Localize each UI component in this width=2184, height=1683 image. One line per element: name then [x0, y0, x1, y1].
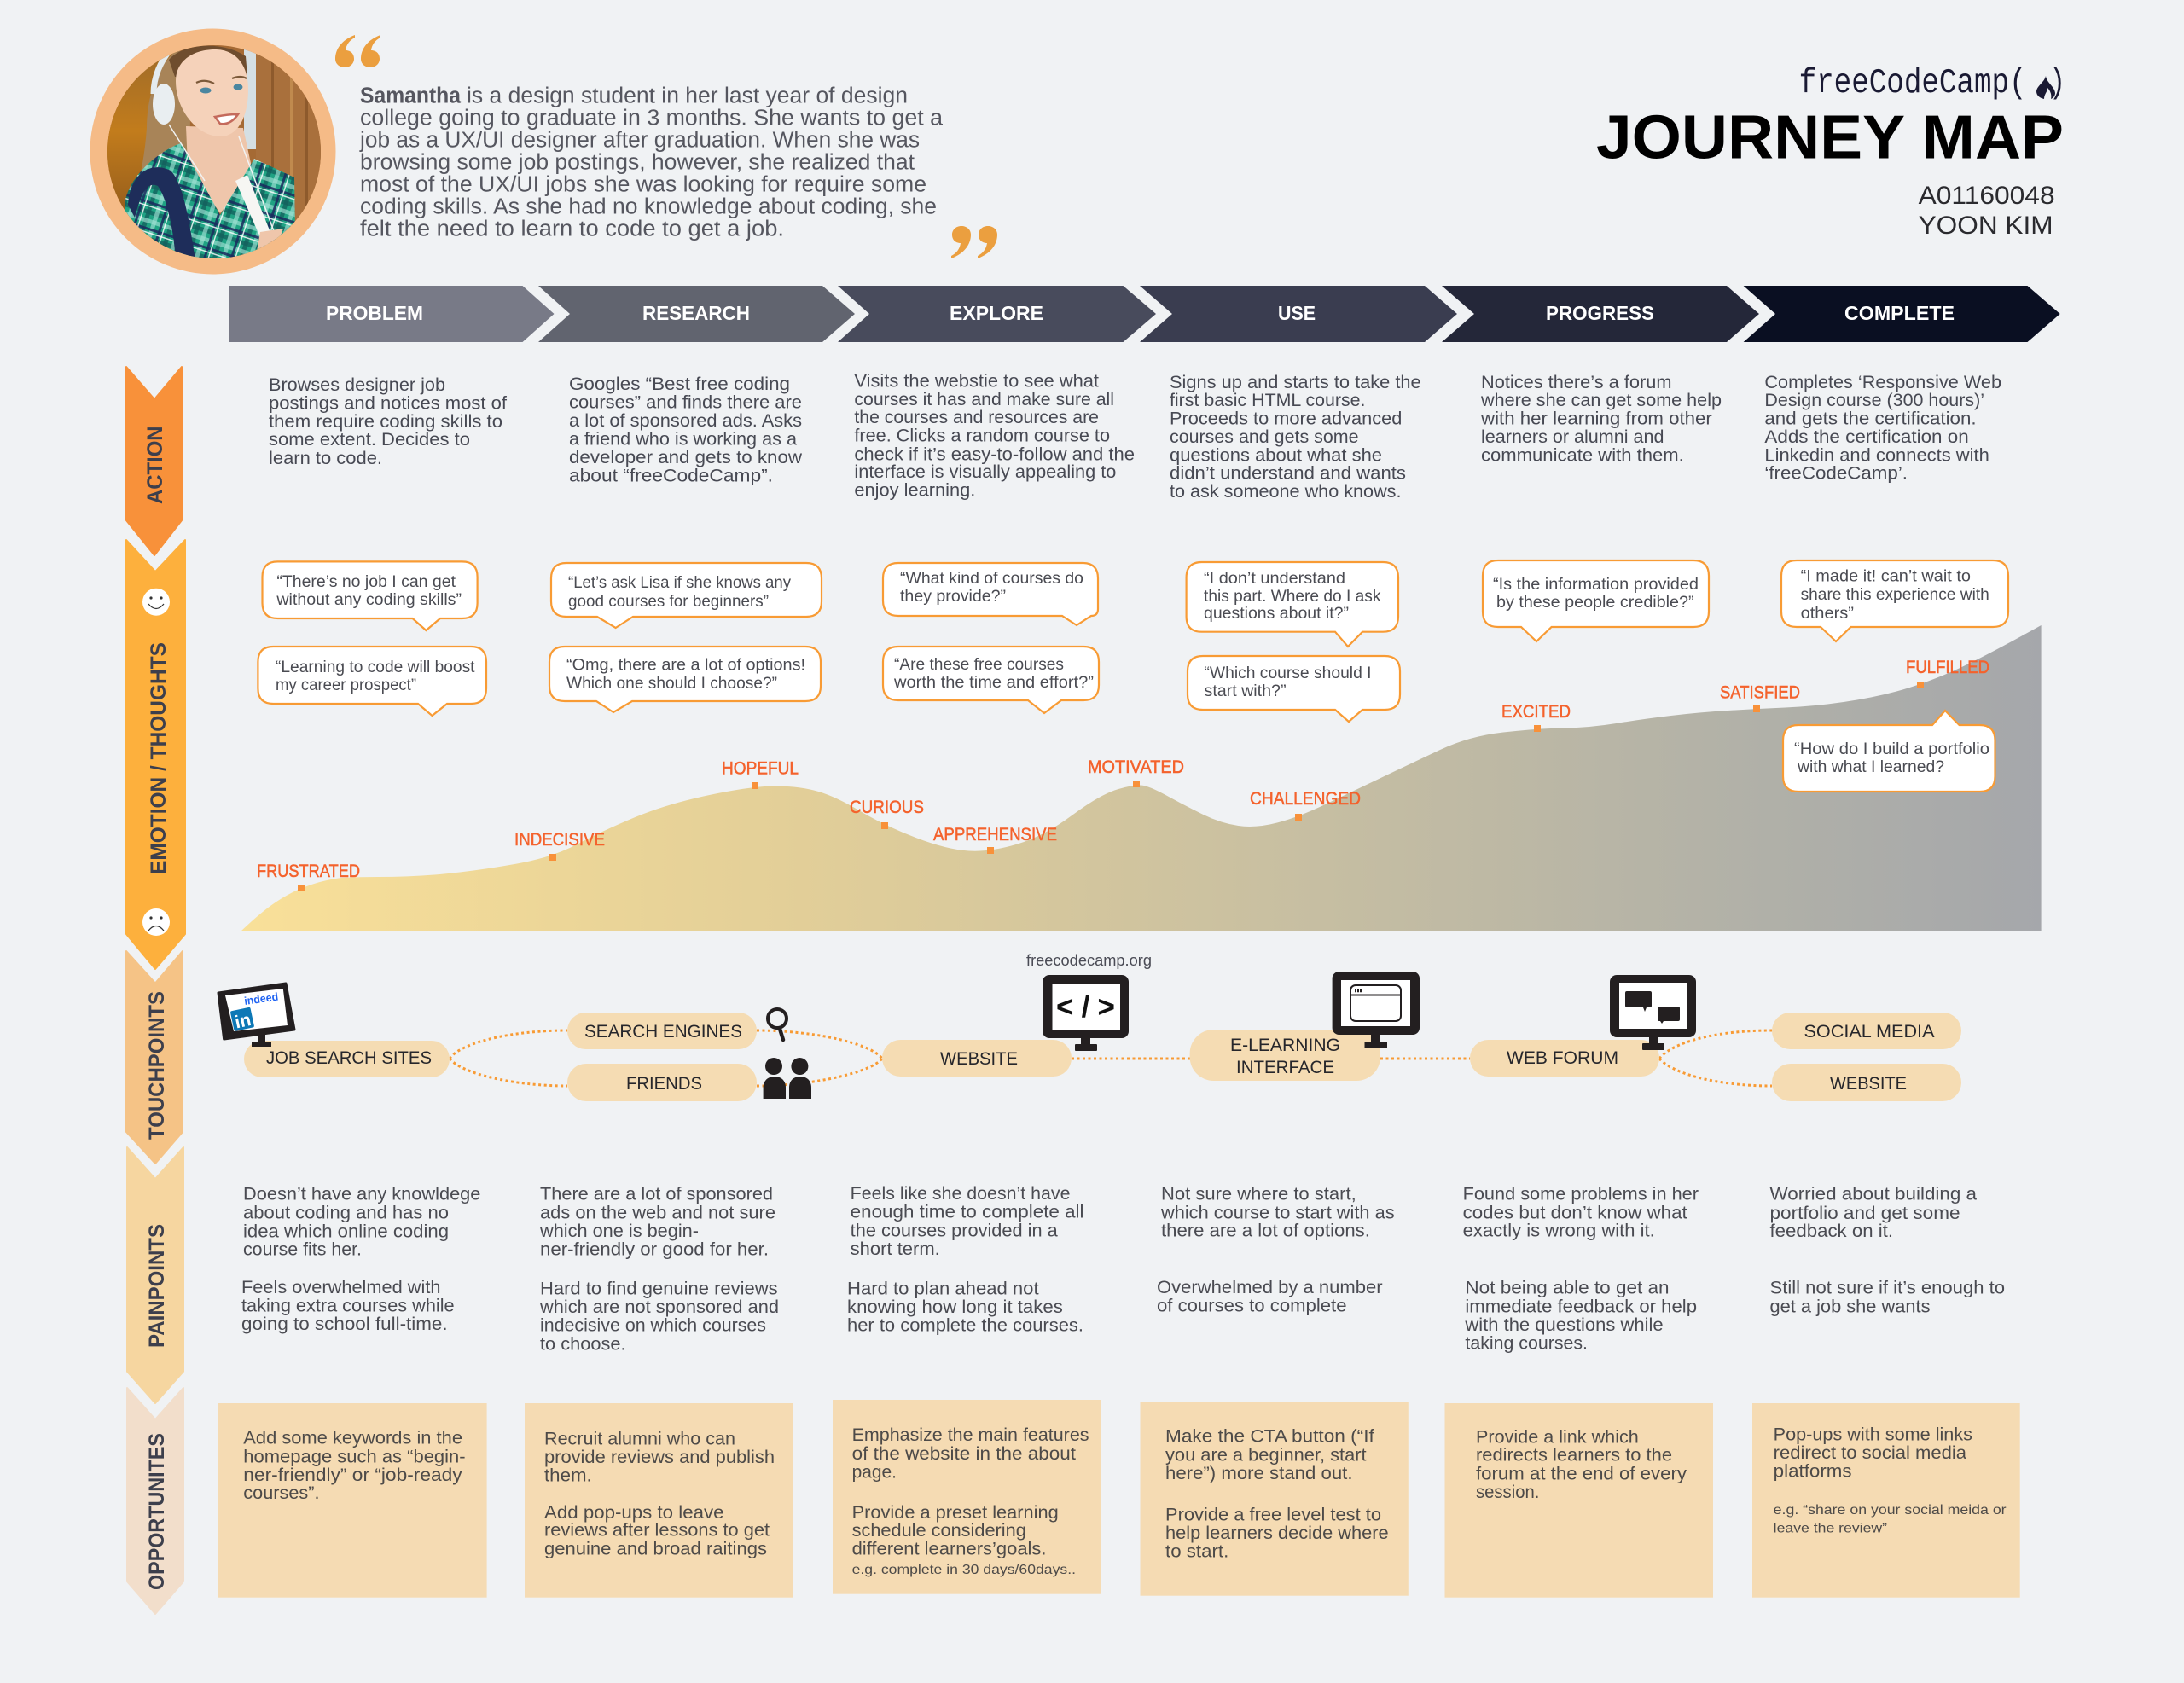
action: explore: Visits the webstie to see what	[854, 370, 1099, 391]
row label: opportunites: OPPORTUNITES	[145, 1433, 169, 1590]
title: JOURNEY MAP	[1596, 104, 2064, 172]
icon: monitor with indeed and linkedin	[218, 984, 294, 1047]
painpoints: research	[539, 1185, 779, 1354]
painpoints: complete: Still not sure if it’s enough to	[1769, 1279, 2005, 1298]
opportunity: research: reviews after lessons to get	[544, 1521, 770, 1541]
painpoints: research: indecisive on which courses	[540, 1316, 766, 1336]
emotion: challenged: CHALLENGED	[1250, 789, 1361, 809]
bubble: don't understand	[1187, 562, 1398, 647]
thought bubbles	[258, 560, 2008, 792]
painpoints: research: which one is begin-	[539, 1222, 699, 1241]
icon: monitor with chat bubbles	[1610, 975, 1696, 1050]
opportunity: explore: different learners’goals.	[852, 1540, 1046, 1559]
icon: happy face	[142, 589, 170, 616]
opportunity: use: you are a beginner, start	[1165, 1446, 1367, 1465]
painpoints: explore: the courses provided in a	[851, 1221, 1058, 1240]
icon: magnifier	[768, 1009, 787, 1040]
painpoints: explore: Feels like she doesn’t have	[851, 1184, 1070, 1204]
painpoints: explore: short term.	[851, 1239, 940, 1259]
opportunity: use: Make the CTA button (“If	[1165, 1427, 1374, 1447]
icon: monitor with code tag	[1043, 975, 1129, 1051]
action: problem: some extent. Decides to	[269, 429, 470, 450]
action: complete: and gets the certification.	[1764, 409, 1977, 429]
touchpoint: e-learning interface	[1190, 1030, 1380, 1081]
painpoints: complete: get a job she wants	[1769, 1297, 1930, 1316]
emotion: hopeful	[722, 759, 799, 789]
touchpoint: friends: FRIENDS	[626, 1073, 702, 1094]
action: progress: where she can get some help	[1480, 390, 1722, 410]
action: explore: free. Clicks a random course to	[854, 425, 1110, 445]
author id and name	[1919, 182, 2055, 240]
opportunity: problem: homepage such as “begin-	[243, 1447, 466, 1466]
touchpoint: job search sites: JOB SEARCH SITES	[266, 1048, 432, 1068]
touchpoint: e-learning interface: INTERFACE	[1236, 1057, 1334, 1077]
painpoints: research: There are a lot of sponsored	[540, 1185, 773, 1204]
opportunity: progress: session.	[1476, 1483, 1539, 1502]
painpoints: use: there are a lot of options.	[1161, 1221, 1370, 1240]
painpoints: progress: exactly is wrong with it.	[1463, 1221, 1655, 1240]
painpoints: progress: immediate feedback or help	[1465, 1297, 1697, 1316]
emotion: satisfied: SATISFIED	[1720, 683, 1800, 703]
persona photo: Samantha	[90, 29, 336, 275]
action: explore: check if it’s easy-to-follow and the	[854, 444, 1135, 464]
persona description: Samantha	[360, 84, 462, 108]
action row text	[269, 370, 2001, 502]
painpoints: progress: Not being able to get an	[1465, 1279, 1670, 1298]
touchpoint: search engines: SEARCH ENGINES	[584, 1021, 742, 1042]
stage: explore: EXPLORE	[950, 302, 1043, 324]
action: complete: Linkedin and connects with	[1764, 445, 1989, 466]
opportunity: progress	[1445, 1403, 1713, 1598]
painpoints: progress: with the questions while	[1464, 1315, 1664, 1335]
bubble: ask Lisa: good courses for beginners”	[568, 592, 769, 611]
bubble: learning to code	[258, 647, 486, 716]
stage: complete	[1744, 286, 2060, 342]
action: research: about “freeCodeCamp”.	[569, 466, 773, 486]
opportunity: use: here”) more stand out.	[1165, 1464, 1353, 1483]
action: problem: them require coding skills to	[269, 411, 502, 432]
action: use: first basic HTML course.	[1170, 390, 1365, 410]
action: progress: learners or alumni and	[1481, 427, 1664, 447]
emotion: apprehensive: APPREHENSIVE	[933, 825, 1057, 844]
touchpoint: search engines	[567, 1013, 757, 1049]
action: complete: Design course (300 hours)’	[1764, 390, 1984, 410]
opportunity: problem: ner-friendly” or “job-ready	[243, 1465, 462, 1485]
bubble: lots of options: Which one should I choose?”	[566, 674, 777, 693]
stage: problem	[229, 286, 555, 342]
stage: use	[1140, 286, 1457, 342]
opportunity: explore: e.g. complete in 30 days/60days..	[852, 1563, 1076, 1577]
opportunity: research: Recruit alumni who can	[544, 1429, 735, 1448]
action: explore: courses it has and make sure all	[854, 389, 1114, 409]
painpoints: problem: idea which online coding	[243, 1222, 449, 1242]
bubble: what kind of courses	[883, 563, 1098, 625]
emotion: excited: EXCITED	[1502, 702, 1571, 722]
author id and name: YOON KIM	[1919, 212, 2053, 240]
stage: research: RESEARCH	[642, 302, 750, 324]
persona description: browsing some job postings, however, she realized that	[360, 151, 915, 175]
emotion markers and labels	[257, 658, 1989, 891]
opportunity: complete: leave the review”	[1774, 1522, 1887, 1536]
emotion: frustrated: FRUSTRATED	[257, 862, 360, 881]
emotion: satisfied	[1720, 683, 1800, 712]
action: use	[1170, 372, 1421, 502]
bubble: which course: “Which course should I	[1205, 664, 1372, 682]
painpoints: progress	[1463, 1185, 1699, 1354]
opportunity: research: Add pop-ups to leave	[544, 1503, 723, 1523]
action: research: courses” and finds there are	[569, 392, 802, 413]
opportunity: research: them.	[544, 1466, 592, 1486]
bubble: don't understand: “I don’t understand	[1204, 569, 1345, 588]
emotion: motivated: MOTIVATED	[1088, 757, 1184, 777]
emotion: indecisive	[514, 830, 605, 861]
bubble: what kind of courses: “What kind of courses do	[900, 569, 1083, 588]
action: research: Googles “Best free coding	[569, 374, 790, 394]
row label: action: ACTION	[143, 427, 167, 504]
bubble: free courses worth it: worth the time and effort?”	[893, 673, 1094, 692]
opportunity: research: provide reviews and publish	[544, 1448, 775, 1467]
action: complete: Adds the certification on	[1764, 427, 1969, 447]
painpoints: use: Not sure where to start,	[1161, 1185, 1356, 1204]
emotion: frustrated	[257, 862, 360, 891]
icon: monitor with browser window	[1333, 972, 1420, 1048]
touchpoint flow connectors	[450, 1030, 1772, 1086]
opportunity: explore: schedule considering	[852, 1521, 1026, 1541]
painpoints: research: ads on the web and not sure	[540, 1203, 775, 1222]
icon: two people	[764, 1058, 811, 1099]
painpoints: use	[1157, 1185, 1395, 1316]
touchpoint: web forum	[1470, 1040, 1659, 1077]
row label: painpoints	[127, 1147, 183, 1403]
row label: emotion / thoughts: EMOTION / THOUGHTS	[147, 642, 171, 874]
painpoints: complete: feedback on it.	[1769, 1222, 1893, 1241]
opportunity: complete: redirect to social media	[1774, 1443, 1966, 1463]
emotion: apprehensive	[933, 825, 1057, 854]
painpoints: research: ner-friendly or good for her.	[540, 1240, 769, 1260]
opportunity: problem: courses”.	[243, 1483, 319, 1503]
opportunity: research	[525, 1403, 793, 1598]
action: complete	[1764, 372, 2001, 484]
touchpoint: website (final): WEBSITE	[1830, 1073, 1907, 1094]
bubble: learning to code: “Learning to code will boost	[276, 658, 475, 676]
opportunity: use: Provide a free level test to	[1165, 1505, 1381, 1524]
row label: opportunites	[127, 1388, 183, 1614]
opportunity: explore	[833, 1400, 1101, 1594]
bubble: which course	[1188, 656, 1400, 722]
persona description: college going to graduate in 3 months. She wants to get a	[360, 107, 944, 131]
icon: monitor with code tag: </>	[1056, 990, 1115, 1024]
opportunity: explore: of the website in the about	[852, 1444, 1076, 1464]
row label: action	[126, 367, 182, 555]
painpoints: use: which course to start with as	[1160, 1203, 1395, 1222]
painpoints: research: Hard to find genuine reviews	[540, 1279, 778, 1298]
action: explore	[854, 370, 1135, 501]
bubble: I made it: “I made it! can’t wait to	[1801, 567, 1971, 586]
painpoints: complete: portfolio and get some	[1769, 1204, 1960, 1223]
bubble: learning to code: my career prospect”	[276, 676, 416, 694]
painpoints: use: of courses to complete	[1157, 1297, 1346, 1316]
action: research: developer and gets to know	[569, 447, 802, 467]
opportunity: progress: Provide a link which	[1476, 1427, 1639, 1447]
action: research: a friend who is working as a	[569, 428, 797, 449]
persona description: most of the UX/UI jobs she was looking for require some	[360, 173, 926, 197]
painpoints: problem: going to school full-time.	[241, 1314, 448, 1334]
action: complete: Completes ‘Responsive Web	[1764, 372, 2001, 392]
opportunity: explore: Emphasize the main features	[852, 1425, 1089, 1445]
opportunity: research: genuine and broad raitings	[544, 1540, 767, 1559]
persona description	[359, 84, 944, 241]
touchpoint: social media: SOCIAL MEDIA	[1804, 1021, 1935, 1042]
bubble: don't understand: this part. Where do I ask	[1204, 587, 1381, 606]
bubble: lots of options	[549, 647, 821, 712]
bubble: lots of options: “Omg, there are a lot of options!	[566, 656, 805, 675]
opportunity: problem: Add some keywords in the	[243, 1429, 462, 1448]
row label: emotion / thoughts	[126, 540, 185, 969]
row label arrows	[126, 367, 185, 1614]
emotion: curious: CURIOUS	[850, 798, 924, 817]
bubble: don't understand: questions about it?”	[1204, 604, 1349, 623]
touchpoint: website (final)	[1772, 1064, 1961, 1101]
painpoints: progress: Found some problems in her	[1463, 1185, 1699, 1204]
bubble: build a portfolio: “How do I build a portfolio	[1794, 740, 1989, 758]
painpoints: problem: course fits her.	[243, 1240, 362, 1260]
stage: use: USE	[1278, 302, 1316, 324]
bubble: what kind of courses: they provide?”	[900, 587, 1006, 606]
persona description: coding skills. As she had no knowledge about coding, she	[360, 195, 937, 219]
opportunities cards	[218, 1400, 2020, 1598]
journey stage arrows	[229, 286, 2060, 342]
painpoints: explore: her to complete the courses.	[847, 1316, 1083, 1336]
touchpoint: website	[882, 1040, 1072, 1077]
stage: explore	[838, 286, 1156, 342]
brand logo: freeCodeCamp: freeCodeCamp(	[1799, 64, 2027, 103]
painpoints: problem	[241, 1185, 480, 1334]
row label: touchpoints	[126, 951, 183, 1164]
touchpoint: website: WEBSITE	[940, 1048, 1018, 1069]
action: progress: Notices there’s a forum	[1481, 372, 1672, 392]
action: explore: enjoy learning.	[854, 480, 975, 501]
action: use: Signs up and starts to take the	[1170, 372, 1421, 392]
emotion curve area chart	[241, 625, 2042, 931]
author id and name: A01160048	[1919, 182, 2055, 210]
action: progress	[1480, 372, 1722, 466]
emotion: indecisive: INDECISIVE	[514, 830, 605, 850]
action: problem: postings and notices most of	[269, 392, 507, 413]
touchpoint: e-learning interface: E-LEARNING	[1230, 1035, 1340, 1055]
bubble: I made it: share this experience with	[1801, 585, 1989, 604]
action: research	[569, 374, 802, 486]
touchpoint: friends	[567, 1064, 757, 1101]
bubble: I made it	[1781, 560, 2008, 641]
label: freecodecamp.org: freecodecamp.org	[1026, 951, 1152, 969]
brand logo: freeCodeCamp: )	[2049, 64, 2065, 103]
bubble: no job without coding: “There’s no job I can get	[276, 572, 456, 591]
icon: sad face	[142, 908, 170, 936]
painpoints: problem: Feels overwhelmed with	[241, 1278, 440, 1297]
opportunity: progress: forum at the end of every	[1476, 1464, 1687, 1483]
persona description: job as a UX/UI designer after graduation. When she was	[359, 129, 920, 153]
action: use: courses and gets some	[1170, 427, 1358, 447]
opportunity: use: help learners decide where	[1165, 1523, 1389, 1543]
painpoints: progress: taking courses.	[1465, 1334, 1588, 1354]
painpoints: explore: Hard to plan ahead not	[847, 1279, 1039, 1298]
bubble: is information credible: by these people credible?”	[1496, 593, 1694, 612]
touchpoint: web forum: WEB FORUM	[1507, 1048, 1618, 1068]
opportunity: complete: e.g. “share on your social meida or	[1774, 1503, 2007, 1518]
action: progress: with her learning from other	[1480, 409, 1712, 429]
emotion: challenged	[1250, 789, 1361, 821]
action: use: to ask someone who knows.	[1170, 481, 1401, 502]
action: explore: the courses and resources are	[854, 407, 1099, 427]
touchpoint: social media	[1772, 1013, 1961, 1049]
stage: progress	[1442, 286, 1759, 342]
action: use: Proceeds to more advanced	[1170, 409, 1402, 429]
opportunity: complete: Pop-ups with some links	[1774, 1425, 1972, 1444]
bubble: build a portfolio	[1783, 711, 1995, 792]
touchpoint: job search sites	[244, 1041, 450, 1077]
emotion: fulfilled	[1906, 658, 1989, 688]
action: use: didn’t understand and wants	[1170, 463, 1406, 484]
emotion: excited	[1502, 702, 1571, 732]
opportunity: explore: Provide a preset learning	[852, 1503, 1059, 1523]
bubble: no job without coding: without any coding skills”	[276, 590, 462, 609]
row label: touchpoints: TOUCHPOINTS	[145, 991, 169, 1140]
emotion: motivated	[1088, 757, 1184, 787]
emotion: fulfilled: FULFILLED	[1906, 658, 1989, 677]
action: problem	[269, 374, 507, 468]
bubble: ask Lisa	[551, 563, 822, 628]
bubble: I made it: others”	[1801, 604, 1854, 623]
touchpoint pills	[244, 1013, 1961, 1101]
painpoints: explore: enough time to complete all	[851, 1203, 1083, 1222]
stage: complete: COMPLETE	[1844, 302, 1955, 324]
bubble: ask Lisa: “Let’s ask Lisa if she knows any	[568, 573, 791, 592]
action: progress: communicate with them.	[1481, 445, 1684, 466]
action: problem: learn to code.	[269, 448, 382, 468]
opportunity: progress: redirects learners to the	[1476, 1446, 1672, 1465]
bubble: free courses worth it: “Are these free courses	[894, 655, 1064, 674]
opportunity: explore: page.	[852, 1463, 897, 1483]
bubble: which course: start with?”	[1205, 682, 1287, 700]
bubble: is information credible: “Is the information provided	[1493, 575, 1699, 594]
painpoints: use: Overwhelmed by a number	[1157, 1278, 1383, 1297]
opportunity: use	[1140, 1402, 1409, 1596]
bubble: build a portfolio: with what I learned?	[1797, 757, 1944, 776]
opportunity: use: to start.	[1165, 1542, 1228, 1562]
painpoints: problem: Doesn’t have any knowldege	[243, 1185, 480, 1204]
bubble: free courses worth it	[883, 647, 1099, 713]
painpoints: complete: Worried about building a	[1769, 1185, 1977, 1204]
persona description: felt the need to learn to code to get a job.	[360, 218, 784, 241]
bubble: is information credible	[1483, 560, 1709, 641]
action: research: a lot of sponsored ads. Asks	[569, 410, 802, 431]
emotion: curious	[850, 798, 924, 829]
opportunity: complete: platforms	[1774, 1462, 1852, 1482]
row label: painpoints: PAINPOINTS	[145, 1224, 169, 1348]
painpoints: progress: codes but don’t know what	[1463, 1203, 1687, 1222]
painpoints text	[241, 1184, 2005, 1354]
bubble: no job without coding	[263, 561, 478, 630]
painpoints: explore: knowing how long it takes	[847, 1297, 1063, 1317]
opportunity: problem	[218, 1403, 487, 1598]
painpoints: explore	[847, 1184, 1083, 1336]
action: explore: interface is visually appealing to	[854, 461, 1116, 482]
persona description: is a design student in her last year of design	[467, 84, 908, 108]
painpoints: research: which are not sponsored and	[539, 1297, 779, 1317]
stage: progress: PROGRESS	[1546, 302, 1654, 324]
emotion: hopeful: HOPEFUL	[722, 759, 799, 778]
painpoints: complete	[1769, 1185, 2005, 1316]
painpoints: problem: about coding and has no	[243, 1203, 449, 1222]
action: problem: Browses designer job	[269, 374, 445, 395]
stage: research	[538, 286, 855, 342]
action: use: questions about what she	[1170, 445, 1382, 466]
icon: opening quote mark	[335, 35, 380, 67]
icon: closing quote mark	[951, 226, 997, 258]
action: complete: ‘freeCodeCamp’.	[1764, 463, 1908, 484]
icon: monitor with indeed and linkedin: indeed	[243, 990, 279, 1007]
painpoints: problem: taking extra courses while	[241, 1297, 455, 1316]
opportunity: complete	[1752, 1403, 2020, 1598]
icon: monitor with indeed and linkedin: in	[233, 1010, 253, 1032]
stage: problem: PROBLEM	[326, 302, 423, 324]
painpoints: research: to choose.	[540, 1334, 626, 1354]
